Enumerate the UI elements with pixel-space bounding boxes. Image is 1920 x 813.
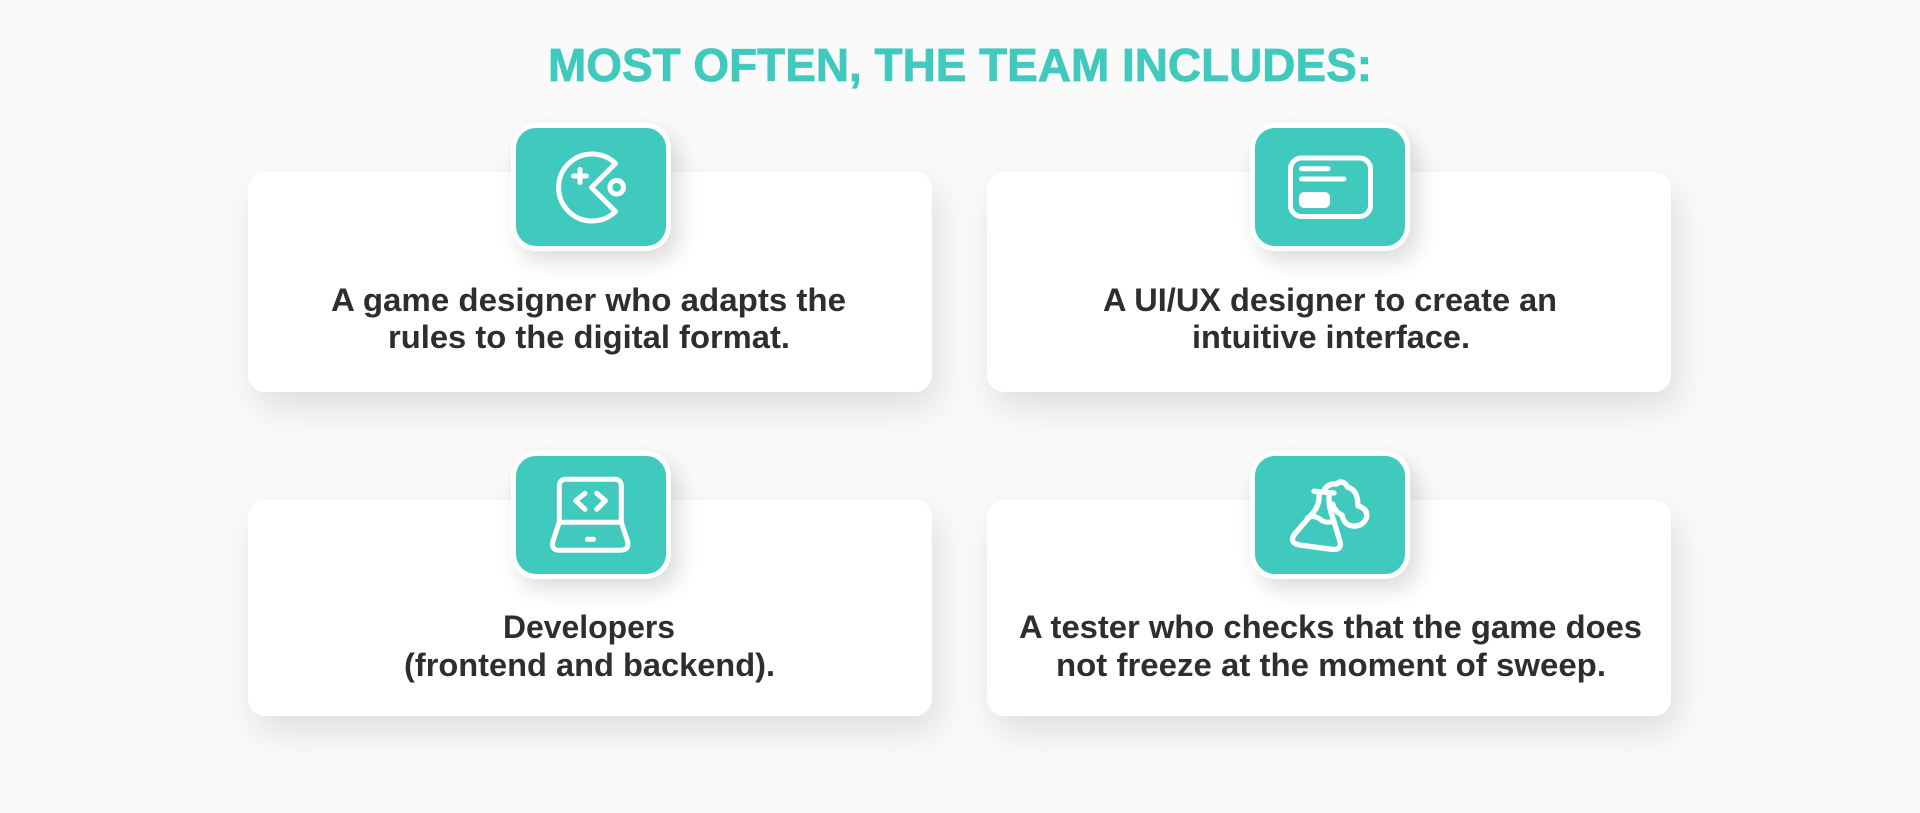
icon: flask with foam [1250, 451, 1410, 579]
text: developers: (frontend and backend). [404, 647, 775, 683]
icon: laptop with code [511, 451, 671, 579]
panel: tester [985, 456, 1687, 741]
text: UI/UX designer: intuitive interface. [1192, 319, 1470, 355]
text: tester [1019, 609, 1642, 683]
card background [248, 500, 932, 716]
text: tester: A tester who checks that the game does [1019, 609, 1642, 645]
panel: UI/UX designer [985, 128, 1687, 417]
text: developers [404, 609, 775, 683]
text: UI/UX designer [1103, 282, 1557, 355]
icon: pac-man game [511, 123, 671, 251]
panel: game designer [246, 128, 948, 417]
card background [987, 172, 1671, 392]
card background [248, 172, 932, 392]
card background [987, 500, 1671, 716]
text: tester: not freeze at the moment of sweep. [1056, 647, 1606, 683]
text: game designer: A game designer who adapts the [331, 282, 846, 318]
text: game designer [331, 282, 846, 355]
text: developers: Developers [503, 609, 675, 645]
text: game designer: rules to the digital format. [388, 319, 790, 355]
title: MOST OFTEN, THE TEAM INCLUDES: [548, 39, 1372, 91]
text: UI/UX designer: A UI/UX designer to create an [1103, 282, 1557, 318]
icon: interface window [1250, 123, 1410, 251]
panel: developers [246, 456, 948, 741]
